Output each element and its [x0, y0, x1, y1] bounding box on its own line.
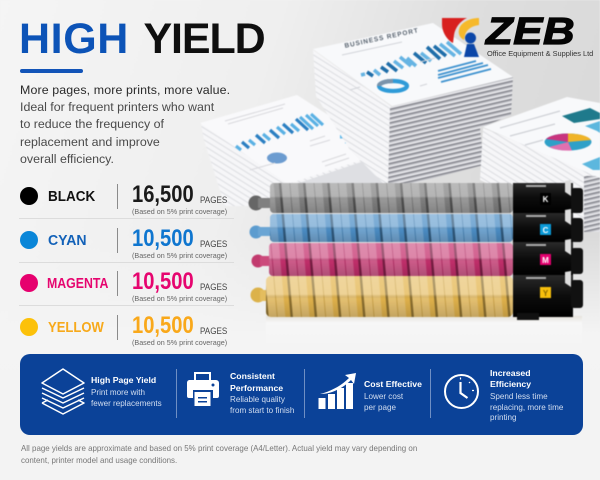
benefit: cost effective — [364, 379, 422, 412]
left paper stack — [200, 95, 388, 206]
intro paragraph: replacement and improve — [20, 135, 160, 149]
title: HIGH YIELD — [19, 15, 265, 63]
icon: paper stack — [41, 368, 85, 415]
benefit: cost effective: Cost Effective — [364, 379, 422, 389]
benefit: cost effective: Lower cost — [364, 392, 403, 401]
toner: yellow: Y — [543, 289, 549, 298]
footnote — [21, 444, 417, 465]
logo icon — [442, 18, 479, 57]
row: cyan: CYAN — [48, 233, 87, 249]
row: cyan: 10,500 — [132, 225, 194, 252]
toner reflection — [266, 316, 582, 350]
row: black — [20, 181, 227, 216]
intro paragraph: More pages, more prints, more value. — [20, 83, 230, 97]
main paper stack — [313, 23, 513, 190]
toner: magenta: M — [542, 256, 549, 265]
benefit: consistent performance: Performance — [230, 382, 283, 392]
benefit: increased efficiency: Efficiency — [490, 379, 531, 389]
toner: cyan — [250, 209, 583, 242]
logo tagline: Office Equipment & Supplies Ltd — [487, 49, 593, 58]
row: black: BLACK — [48, 189, 95, 205]
row: black: PAGES — [200, 195, 227, 205]
row: magenta — [20, 268, 227, 303]
benefit: high page yield — [91, 375, 162, 408]
benefit: consistent performance: Reliable quality — [230, 395, 285, 404]
intro paragraph: overall efficiency. — [20, 152, 114, 166]
icon: growth chart — [318, 373, 356, 409]
benefit: consistent performance: from start to finish — [230, 406, 294, 415]
benefit: increased efficiency: replacing, more time — [490, 403, 563, 412]
row: cyan: (Based on 5% print coverage) — [132, 251, 227, 260]
row: magenta: (Based on 5% print coverage) — [132, 294, 227, 303]
icon: clock — [444, 374, 479, 409]
row: cyan — [20, 225, 227, 260]
row: magenta: PAGES — [200, 282, 227, 292]
toner: yellow — [250, 271, 583, 320]
benefit: increased efficiency: Increased — [490, 368, 531, 378]
intro paragraph: to reduce the frequency of — [20, 117, 164, 131]
benefits band — [20, 354, 583, 435]
row: yellow: YELLOW — [48, 320, 104, 336]
intro paragraph — [20, 83, 230, 166]
logo wordmark: ZEB — [486, 11, 575, 53]
row: yellow: PAGES — [200, 326, 227, 336]
toner: black: K — [543, 195, 549, 204]
row: yellow: 10,500 — [132, 312, 194, 339]
benefit: high page yield: High Page Yield — [91, 375, 156, 385]
row: cyan: PAGES — [200, 239, 227, 249]
intro paragraph: Ideal for frequent printers who want — [20, 100, 214, 114]
benefit: increased efficiency: Spend less time — [490, 392, 548, 401]
title underline — [20, 69, 83, 73]
toner: cyan: C — [543, 226, 549, 235]
icon: printer — [187, 372, 219, 406]
row: yellow: (Based on 5% print coverage) — [132, 338, 227, 347]
benefit: increased efficiency — [490, 368, 563, 422]
footnote: All page yields are approximate and based on 5% print coverage (A4/Letter). Actual yield may vary depending on — [21, 444, 417, 453]
toner: black — [248, 180, 583, 213]
row: magenta: 10,500 — [132, 268, 194, 295]
row: black: 16,500 — [132, 181, 194, 208]
row: magenta: MAGENTA — [47, 276, 108, 292]
footnote: content, printer model and usage conditions. — [21, 456, 177, 465]
benefit: high page yield: Print more with — [91, 388, 145, 397]
report title: BUSINESS REPORT — [344, 27, 419, 50]
row: black: (Based on 5% print coverage) — [132, 207, 227, 216]
benefit: high page yield: fewer replacements — [91, 399, 162, 408]
benefit: consistent performance — [230, 371, 294, 415]
benefit: consistent performance: Consistent — [230, 371, 275, 381]
toner: magenta — [252, 239, 583, 276]
benefit: increased efficiency: printing — [490, 413, 517, 422]
right paper stack — [480, 97, 600, 232]
yield table — [19, 181, 234, 347]
row: yellow — [20, 312, 227, 347]
benefit: cost effective: per page — [364, 403, 396, 412]
